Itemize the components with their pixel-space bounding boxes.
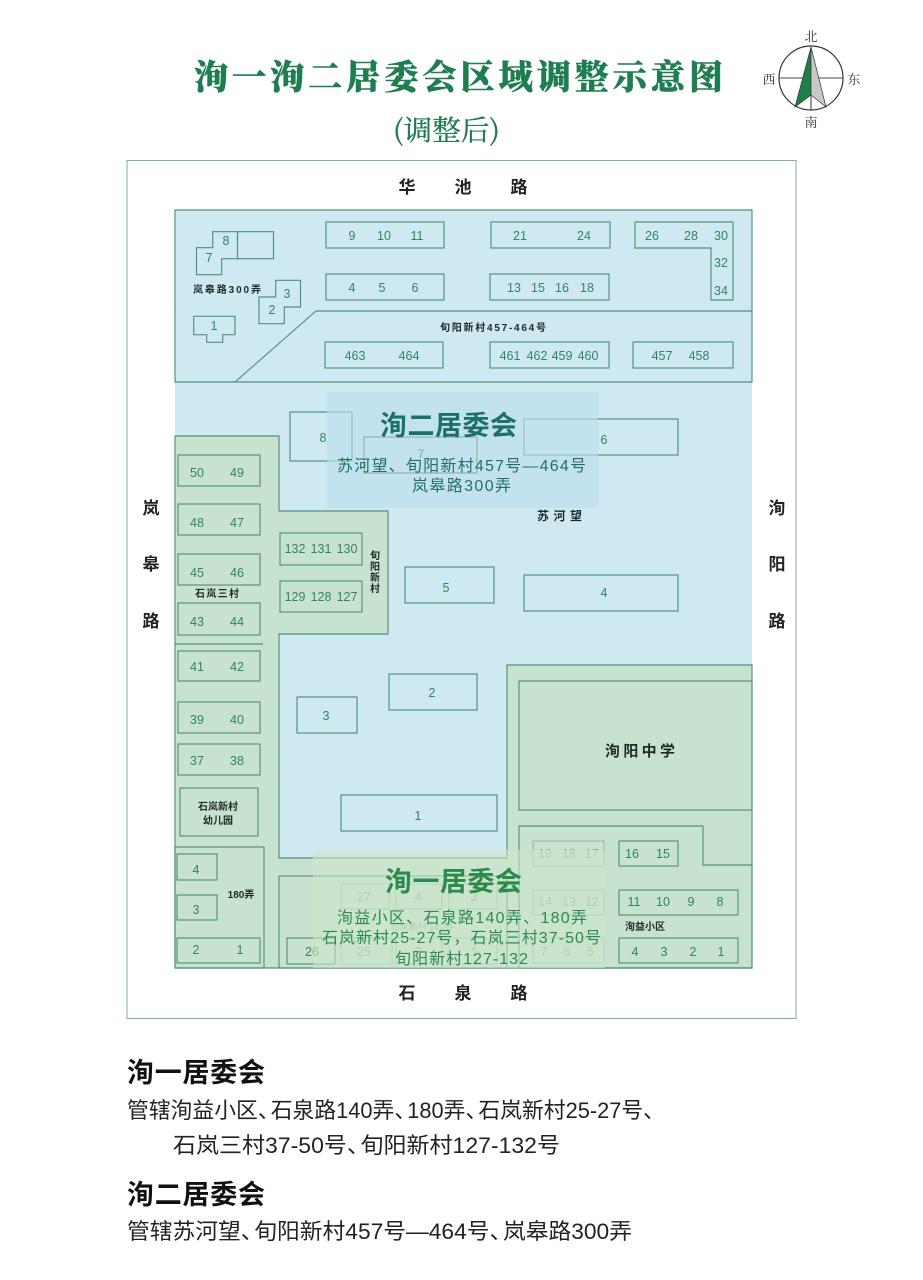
panel: 岚皋路300弄 and 旬阳新村 north block: 32: [714, 256, 728, 270]
road labels: [142, 178, 786, 1003]
icon: compass: 西: [762, 69, 776, 88]
road labels: 阳: [768, 555, 786, 574]
callout: 洵二居委会: 7: [418, 447, 425, 461]
panel: 岚皋路300弄 and 旬阳新村 north block: [175, 210, 752, 382]
panel: 苏河望 buildings: 6: [601, 433, 608, 447]
panel: 石岚三村 and 旬阳新村 west block: 38: [230, 754, 244, 768]
panel: 洵益小区: 16: [625, 847, 639, 861]
panel: 洵阳中学: 洵阳中学: [605, 742, 675, 760]
panel: 洵益小区: 19: [538, 847, 552, 861]
panel: 岚皋路300弄 and 旬阳新村 north block: 18: [580, 281, 594, 295]
panel: 苏河望 buildings: 8: [320, 431, 327, 445]
panel: 洵益小区: 4: [632, 945, 639, 959]
panel: 石泉路140弄: 4: [415, 890, 422, 904]
panel: 苏河望 buildings: 2: [429, 686, 436, 700]
panel: 石泉路140弄: 石岚新村 140弄: [391, 921, 453, 932]
road labels: 岚: [142, 499, 160, 518]
panel: 岚皋路300弄 and 旬阳新村 north block: 457: [652, 349, 672, 363]
panel: 洵阳中学: [519, 681, 752, 810]
panel: 岚皋路300弄 and 旬阳新村 north block: 463: [345, 349, 365, 363]
road labels: 路: [142, 612, 160, 631]
panel: map frame: [127, 160, 796, 1018]
panel: 岚皋路300弄 and 旬阳新村 north block: 16: [555, 281, 569, 295]
subtitle: (调整后): [393, 109, 500, 149]
panel: 洵益小区: 7: [541, 945, 548, 959]
panel: 岚皋路300弄 and 旬阳新村 north block: 11: [411, 229, 424, 243]
panel: 石岚三村 and 旬阳新村 west block: 村: [370, 582, 380, 595]
panel: 180弄: 180弄: [228, 889, 254, 901]
icon: compass: [762, 26, 861, 131]
panel: 洵益小区: 17: [585, 847, 599, 861]
panel: 洵益小区: 5: [587, 945, 594, 959]
text block: 洵一居委会: 洵一居委会: [127, 1058, 265, 1088]
icon: compass: 东: [847, 69, 861, 88]
text block: 洵二居委会: [127, 1180, 632, 1244]
panel: 石岚三村 and 旬阳新村 west block: 48: [190, 516, 204, 530]
panel: 岚皋路300弄 and 旬阳新村 north block: 8: [223, 234, 230, 248]
panel: 岚皋路300弄 and 旬阳新村 north block: 34: [714, 284, 728, 298]
callout: 洵一居委会: 石岚新村25-27号，石岚三村37-50号: [322, 929, 601, 947]
road labels: 洵: [768, 499, 786, 518]
panel: 石岚三村 and 旬阳新村 west block: 42: [230, 660, 244, 674]
panel: 洵益小区: 2: [690, 945, 697, 959]
panel: 岚皋路300弄 and 旬阳新村 north block: 1: [211, 319, 218, 333]
panel: 石岚三村 and 旬阳新村 west block: 41: [190, 660, 204, 674]
panel: 洵益小区: 13: [562, 895, 576, 909]
panel: 洵益小区: 8: [717, 895, 724, 909]
panel: 洵益小区: 10: [656, 895, 670, 909]
panel: 180弄: [175, 847, 264, 968]
panel: 180弄: 2: [193, 943, 200, 957]
panel: 岚皋路300弄 and 旬阳新村 north block: 3: [284, 287, 291, 301]
panel: blue zone: [175, 210, 752, 858]
text block: 洵一居委会: 石岚三村37-50号、旬阳新村127-132号: [173, 1133, 560, 1158]
panel: 岚皋路300弄 and 旬阳新村 north block: 15: [531, 281, 545, 295]
callout: 洵一居委会: 洵益小区、石泉路140弄、180弄: [337, 909, 587, 927]
panel: 石岚三村 and 旬阳新村 west block: [175, 455, 380, 836]
panel: 苏河望 buildings: [290, 412, 678, 831]
panel: 石岚三村 and 旬阳新村 west block: 旬: [370, 549, 380, 562]
panel: 洵益小区: 9: [688, 895, 695, 909]
panel: 洵益小区: 12: [585, 895, 599, 909]
callout: 洵一居委会: [313, 850, 605, 968]
road labels: 路: [768, 612, 786, 631]
icon: compass: 南: [804, 112, 818, 131]
panel: 石岚三村 and 旬阳新村 west block: 127: [337, 590, 357, 604]
text block: 洵一居委会: [127, 1058, 665, 1158]
panel: 洵益小区: 3: [661, 945, 668, 959]
panel: 洵益小区: 15: [656, 847, 670, 861]
panel: 180弄: 4: [193, 863, 200, 877]
panel: 岚皋路300弄 and 旬阳新村 north block: 459: [552, 349, 572, 363]
panel: 石岚三村 and 旬阳新村 west block: 石岚三村: [195, 587, 239, 600]
panel: 岚皋路300弄 and 旬阳新村 north block: 21: [513, 229, 527, 243]
panel: 苏河望 buildings: 苏河望: [537, 508, 582, 523]
panel: 石泉路140弄: 3: [471, 890, 478, 904]
panel: 洵益小区: 1: [718, 945, 725, 959]
panel: 岚皋路300弄 and 旬阳新村 north block: 7: [206, 251, 213, 265]
panel: 石岚三村 and 旬阳新村 west block: 37: [190, 754, 204, 768]
panel: 岚皋路300弄 and 旬阳新村 north block: 464: [399, 349, 419, 363]
text block: 洵一居委会: 管辖洵益小区、石泉路140弄、180弄、石岚新村25-27号、: [127, 1098, 665, 1123]
panel: 石泉路140弄: 25: [357, 945, 371, 959]
text block: 洵二居委会: 管辖苏河望、旬阳新村457号—464号、岚皋路300弄: [127, 1219, 632, 1244]
title: 洵一洵二居委会区域调整示意图: [194, 50, 723, 99]
text block: 洵二居委会: 洵二居委会: [127, 1180, 265, 1210]
panel: 岚皋路300弄 and 旬阳新村 north block: 458: [689, 349, 709, 363]
panel: 苏河望 buildings: 1: [415, 809, 422, 823]
road labels: 华: [398, 178, 416, 197]
panel: 岚皋路300弄 and 旬阳新村 north block: 6: [412, 281, 419, 295]
panel: 苏河望 buildings: 5: [443, 581, 450, 595]
road labels: 池: [454, 178, 472, 197]
panel: 岚皋路300弄 and 旬阳新村 north block: 9: [349, 229, 356, 243]
panel: 岚皋路300弄 and 旬阳新村 north block: 5: [379, 281, 386, 295]
panel: 岚皋路300弄 and 旬阳新村 north block: 461: [500, 349, 520, 363]
panel: 石岚三村 and 旬阳新村 west block: 128: [311, 590, 331, 604]
panel: 石岚三村 and 旬阳新村 west block: 47: [230, 516, 244, 530]
callout: 洵二居委会: 岚皋路300弄: [412, 477, 511, 495]
panel: green zone: [175, 436, 752, 968]
road labels: 路: [510, 984, 528, 1003]
panel: 石岚三村 and 旬阳新村 west block: 50: [190, 466, 204, 480]
panel: 洵益小区: 6: [564, 945, 571, 959]
panel: 石泉路140弄: 1: [471, 945, 478, 959]
callout: 洵一居委会: 洵一居委会: [385, 867, 522, 897]
panel: 石岚三村 and 旬阳新村 west block: 44: [230, 615, 244, 629]
panel: 洵益小区: 18: [562, 847, 576, 861]
panel: 岚皋路300弄 and 旬阳新村 north block: 13: [507, 281, 521, 295]
panel: 岚皋路300弄 and 旬阳新村 north block: 4: [349, 281, 356, 295]
icon: compass: 北: [804, 26, 818, 45]
panel: 石岚三村 and 旬阳新村 west block: 40: [230, 713, 244, 727]
panel: 苏河望 buildings: 3: [323, 709, 330, 723]
panel: 石岚三村 and 旬阳新村 west block: 131: [311, 542, 331, 556]
panel: 石岚三村 and 旬阳新村 west block: 130: [337, 542, 357, 556]
road labels: 石: [398, 984, 416, 1003]
panel: 岚皋路300弄 and 旬阳新村 north block: 旬阳新村457-464号: [440, 321, 546, 334]
panel: 石岚三村 and 旬阳新村 west block: 46: [230, 566, 244, 580]
panel: 石岚三村 and 旬阳新村 west block: 45: [190, 566, 204, 580]
panel: 石岚三村 and 旬阳新村 west block: 132: [285, 542, 305, 556]
callout: 洵二居委会: [327, 392, 598, 508]
panel: 石岚三村 and 旬阳新村 west block: 43: [190, 615, 204, 629]
road labels: 路: [510, 178, 528, 197]
callout: 洵二居委会: 洵二居委会: [380, 411, 517, 441]
panel: 石岚三村 and 旬阳新村 west block: 幼儿园: [203, 814, 233, 827]
road labels: 泉: [454, 983, 472, 1003]
panel: 岚皋路300弄 and 旬阳新村 north block: 460: [578, 349, 598, 363]
callout: 洵一居委会: 旬阳新村127-132: [395, 950, 528, 968]
panel: 苏河望 buildings: 4: [601, 586, 608, 600]
panel: 岚皋路300弄 and 旬阳新村 north block: 2: [269, 303, 276, 317]
panel: 石岚三村 and 旬阳新村 west block: 阳: [370, 560, 380, 573]
panel: 石泉路140弄: 27: [357, 890, 371, 904]
panel: 180弄: 1: [237, 943, 244, 957]
panel: 岚皋路300弄 and 旬阳新村 north block: 462: [527, 349, 547, 363]
panel: 石泉路140弄: [279, 876, 507, 968]
panel: 洵益小区: 11: [628, 895, 641, 909]
panel: 石岚三村 and 旬阳新村 west block: 49: [230, 466, 244, 480]
panel: 岚皋路300弄 and 旬阳新村 north block: 10: [377, 229, 391, 243]
panel: 180弄: 3: [193, 903, 200, 917]
panel: 洵益小区: 洵益小区: [625, 920, 665, 933]
panel: 洵益小区: 14: [538, 895, 552, 909]
panel: 岚皋路300弄 and 旬阳新村 north block: 26: [645, 229, 659, 243]
panel: 石岚三村 and 旬阳新村 west block: 新: [370, 571, 380, 584]
panel: 石泉路140弄: 2: [415, 945, 422, 959]
panel: 岚皋路300弄 and 旬阳新村 north block: 24: [577, 229, 591, 243]
panel: 岚皋路300弄 and 旬阳新村 north block: 28: [684, 229, 698, 243]
panel: 石泉路140弄: 26: [305, 945, 319, 959]
panel: 石岚三村 and 旬阳新村 west block: 石岚新村: [198, 800, 238, 813]
panel: 石岚三村 and 旬阳新村 west block: 39: [190, 713, 204, 727]
road labels: 皋: [142, 555, 160, 574]
callout: 洵二居委会: 苏河望、旬阳新村457号—464号: [337, 457, 586, 475]
panel: 岚皋路300弄 and 旬阳新村 north block: 岚皋路300弄: [193, 283, 261, 296]
panel: 岚皋路300弄 and 旬阳新村 north block: 30: [714, 229, 728, 243]
panel: 石岚三村 and 旬阳新村 west block: 129: [285, 590, 305, 604]
panel: 洵益小区: [519, 826, 752, 968]
